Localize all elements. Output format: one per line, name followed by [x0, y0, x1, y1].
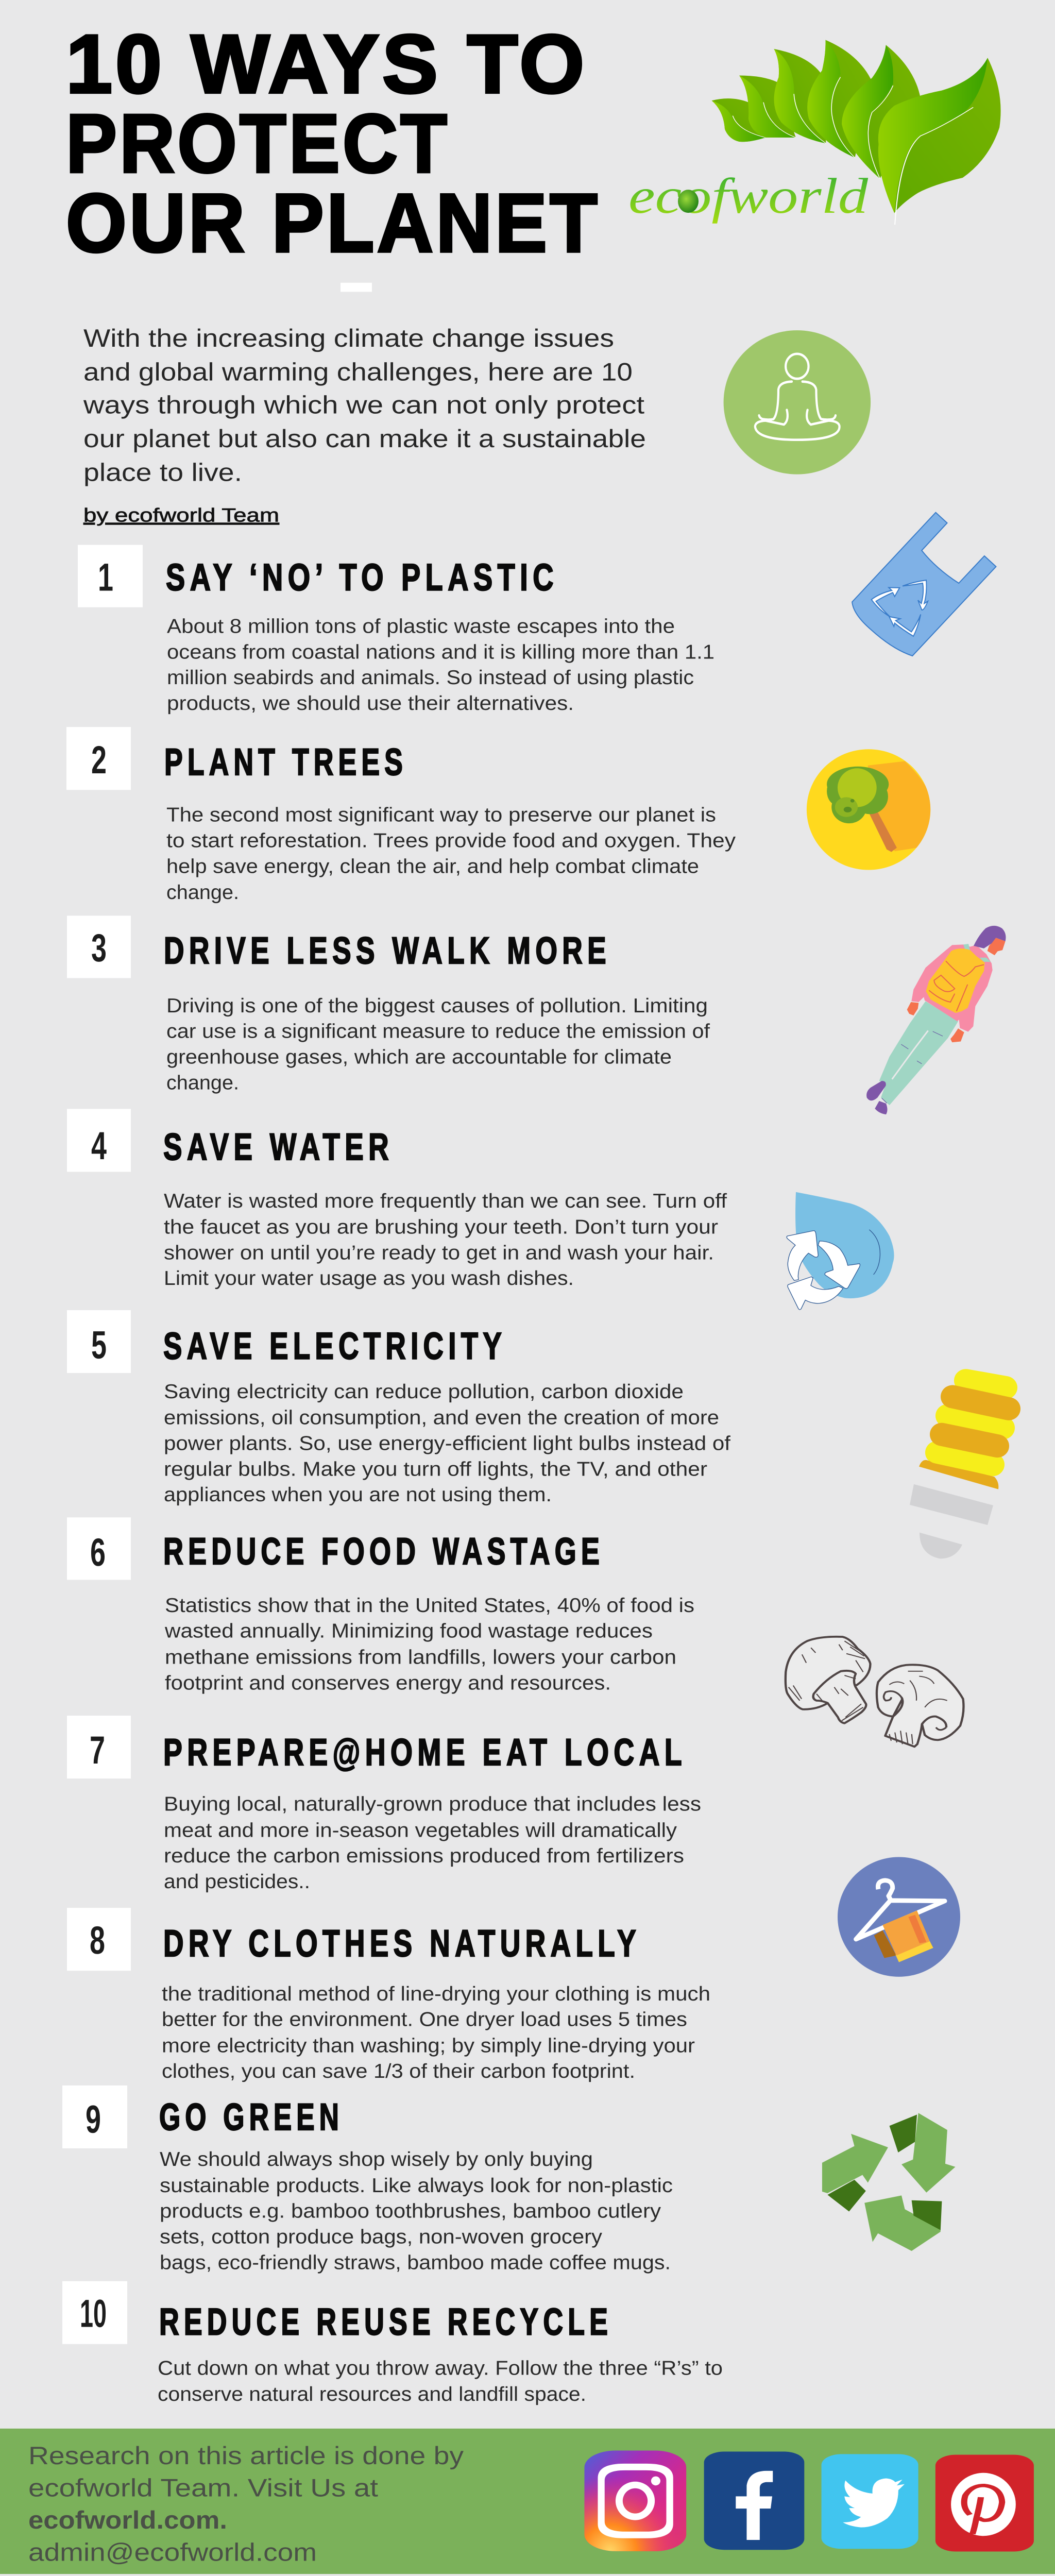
body 6: wasted annually. Minimizing food wastage reduces [164, 1620, 653, 1642]
icon: plastic bag with recycling arrows [852, 513, 996, 656]
body 1: products, we should use their alternatives. [167, 692, 574, 715]
number badge 10: 10 [80, 2291, 107, 2335]
number badge 5 [67, 1310, 131, 1373]
body 7: meat and more in-season vegetables will dramatically [164, 1819, 677, 1841]
body 9: products e.g. bamboo toothbrushes, bamboo cutlery [160, 2200, 661, 2222]
body 5: appliances when you are not using them. [164, 1484, 552, 1506]
number badge 1 [78, 545, 143, 607]
step 7 [67, 1716, 701, 1893]
body 7: and pesticides.. [164, 1871, 310, 1893]
icon: green recycling arrows [822, 2113, 956, 2251]
intro text: ways through which we can not only protect [83, 391, 644, 419]
body 5: emissions, oil consumption, and even the creation of more [164, 1406, 719, 1429]
heading 5: SAVE ELECTRICITY [163, 1325, 506, 1367]
heading 10: REDUCE REUSE RECYCLE [159, 2300, 612, 2343]
footer text: ecofworld.com. [28, 2506, 227, 2534]
body 9: bags, eco-friendly straws, bamboo made coffee mugs. [160, 2251, 671, 2274]
leaf 6 [878, 58, 1001, 213]
heading 8: DRY CLOTHES NATURALLY [163, 1922, 641, 1964]
leaf 5 [842, 45, 921, 179]
step 10 [62, 2281, 723, 2405]
body 10: Cut down on what you throw away. Follow the three “R’s” to [158, 2357, 723, 2379]
number badge 7 [67, 1716, 131, 1778]
number badge 4: 4 [91, 1124, 107, 1168]
body 6: footprint and conserves energy and resources. [165, 1672, 611, 1694]
heading 2: PLANT TREES [164, 741, 407, 783]
heading 1: SAY ‘NO’ TO PLASTIC [166, 556, 558, 598]
body 4: Water is wasted more frequently than we can see. Turn off [164, 1190, 727, 1212]
body 3 [166, 995, 710, 1094]
body 3: change. [166, 1072, 239, 1094]
body 1: million seabirds and animals. So instead of using plastic [167, 667, 694, 689]
body 8: more electricity than washing; by simply line-drying your [162, 2035, 695, 2057]
step 3 [67, 916, 710, 1094]
number badge 3: 3 [91, 926, 107, 970]
step 1 [78, 545, 714, 715]
body 4 [164, 1190, 727, 1290]
step 5 [67, 1310, 731, 1506]
body 5 [164, 1381, 731, 1506]
body 1 [167, 615, 714, 715]
heading 6: REDUCE FOOD WASTAGE [163, 1530, 604, 1572]
body 2: help save energy, clean the air, and help combat climate [166, 855, 699, 877]
body 5: regular bulbs. Make you turn off lights, the TV, and other [164, 1458, 707, 1480]
body 2: to start reforestation. Trees provide food and oxygen. They [166, 829, 736, 852]
heading 9: GO GREEN [159, 2095, 344, 2138]
number badge 5: 5 [91, 1323, 107, 1367]
step 2 [66, 727, 736, 904]
body 3: Driving is one of the biggest causes of pollution. Limiting [166, 995, 708, 1017]
number badge 8 [67, 1908, 131, 1971]
title: PROTECT [66, 97, 450, 190]
logo: ecofworld leaves and wordmark [628, 40, 1001, 225]
step 4 [67, 1109, 727, 1290]
body 4: shower on until you’re ready to get in and wash your hair. [164, 1242, 714, 1264]
number badge 3 [67, 916, 131, 978]
heading 4: SAVE WATER [163, 1126, 394, 1168]
body 6: methane emissions from landfills, lowers your carbon [165, 1646, 676, 1668]
body 2: change. [166, 882, 239, 904]
body 8: the traditional method of line-drying your clothing is much [162, 1983, 710, 2005]
number badge 6: 6 [90, 1530, 106, 1574]
body 9: We should always shop wisely by only buying [160, 2148, 593, 2171]
icon: instagram [584, 2451, 686, 2551]
body 7: reduce the carbon emissions produced from fertilizers [164, 1845, 684, 1867]
body 2: The second most significant way to preserve our planet is [166, 804, 716, 826]
number badge 8: 8 [90, 1918, 105, 1962]
number badge 9: 9 [86, 2097, 101, 2141]
body 7 [164, 1793, 701, 1893]
body 3: car use is a significant measure to reduce the emission of [166, 1020, 710, 1042]
leaf 4 [807, 40, 871, 158]
body 10: conserve natural resources and landfill space. [158, 2383, 586, 2405]
body 5: power plants. So, use energy-efficient light bulbs instead of [164, 1432, 731, 1454]
icon: mushrooms [786, 1637, 964, 1747]
step 9 [62, 2086, 673, 2274]
icon: pinterest [935, 2455, 1034, 2551]
heading 3: DRIVE LESS WALK MORE [164, 929, 611, 972]
icon: facebook [704, 2451, 804, 2550]
small white dash [341, 283, 372, 292]
leaf 2 [739, 75, 796, 138]
footer text [28, 2442, 464, 2566]
intro text: our planet but also can make it a sustainable [83, 425, 646, 453]
number badge 2: 2 [91, 738, 107, 782]
step 8 [67, 1908, 710, 2082]
title [66, 18, 600, 269]
body 8: better for the environment. One dryer load uses 5 times [162, 2008, 687, 2030]
icon: tree on yellow circle [807, 749, 935, 870]
intro text [83, 324, 646, 486]
body 6 [164, 1595, 694, 1694]
footer panel [0, 2429, 1055, 2574]
body 2 [166, 804, 736, 904]
number badge 7: 7 [90, 1728, 105, 1772]
heading 7: PREPARE@HOME EAT LOCAL [163, 1731, 687, 1773]
leaf 3 [774, 49, 826, 143]
logo: ecofworld leaves and wordmark: ecofworld [628, 168, 869, 224]
number badge 2 [66, 727, 131, 790]
intro text: place to live. [83, 459, 242, 486]
footer text: Research on this article is done by [28, 2442, 464, 2470]
icon: water drop with recycling arrows [787, 1192, 894, 1310]
byline: by ecofworld Team [83, 505, 279, 526]
body 8 [162, 1983, 710, 2082]
footer text: admin@ecofworld.com [28, 2538, 317, 2566]
number badge 9 [62, 2086, 127, 2148]
body 1: About 8 million tons of plastic waste escapes into the [167, 615, 675, 637]
body 7: Buying local, naturally-grown produce that includes less [164, 1793, 701, 1815]
icon: twitter [822, 2454, 918, 2549]
body 4: the faucet as you are brushing your teeth. Don’t turn your [164, 1216, 718, 1238]
icon: light bulb [910, 1381, 1009, 1558]
title: 10 WAYS TO [66, 18, 587, 110]
number badge 6 [67, 1517, 131, 1580]
body 9 [160, 2148, 673, 2274]
icon: hanger with towel [838, 1857, 960, 1977]
icon: meditating figure [724, 330, 871, 474]
body 6: Statistics show that in the United States, 40% of food is [165, 1595, 694, 1617]
intro text: With the increasing climate change issues [83, 324, 614, 352]
number badge 4 [67, 1109, 131, 1172]
body 1: oceans from coastal nations and it is killing more than 1.1 [167, 641, 714, 663]
footer text: ecofworld Team. Visit Us at [28, 2474, 378, 2502]
body 9: sets, cotton produce bags, non-woven grocery [160, 2226, 602, 2248]
body 3: greenhouse gases, which are accountable for climate [166, 1046, 672, 1068]
step 6 [67, 1517, 694, 1694]
intro text: and global warming challenges, here are 10 [83, 358, 633, 386]
number badge 10 [62, 2281, 127, 2344]
leaf 1 [712, 98, 765, 142]
body 9: sustainable products. Like always look for non-plastic [160, 2175, 673, 2197]
title: OUR PLANET [66, 177, 600, 269]
number badge 1: 1 [98, 555, 113, 599]
body 4: Limit your water usage as you wash dishes. [164, 1267, 574, 1290]
body 10 [158, 2357, 723, 2405]
icon: walking person with backpack [866, 926, 1006, 1114]
body 8: clothes, you can save 1/3 of their carbon footprint. [162, 2060, 635, 2082]
body 5: Saving electricity can reduce pollution, carbon dioxide [164, 1381, 684, 1403]
